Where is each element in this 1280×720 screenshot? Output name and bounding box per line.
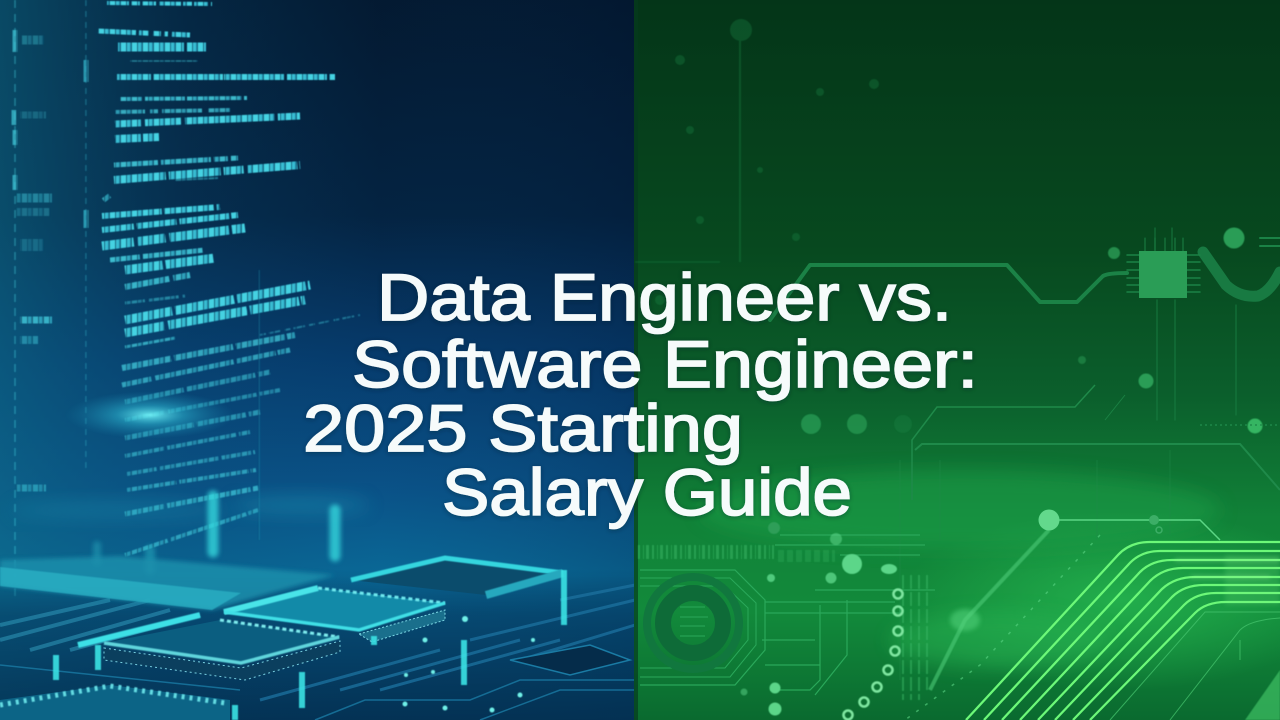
concentric circuit ring [640, 535, 935, 695]
panel: blue data engineering background [0, 0, 635, 720]
bundled glowing green traces [966, 542, 1280, 720]
icon: central light flare [65, 391, 235, 439]
solid green pads [740, 522, 897, 716]
chip: front left [78, 615, 340, 680]
title line 3: 2025 Starting [303, 391, 743, 465]
node with glowing diagonal beam [905, 510, 1220, 720]
chip: centre [224, 588, 445, 642]
chip: back right [351, 558, 563, 595]
faint top-area nodes and lines [635, 19, 879, 305]
title line 2: Software Engineer: [352, 327, 978, 401]
panel: green software engineering background [634, 0, 1280, 720]
glowing vertical connectors [97, 496, 335, 570]
title line 1: Data Engineer vs. [377, 260, 952, 334]
small glowing dots on the board [402, 616, 535, 712]
title [303, 260, 978, 529]
circuit board traces under the chips [0, 570, 635, 720]
code screen: glowing lines of code [14, 0, 360, 600]
ring pads [844, 590, 902, 720]
trace highlights and thin outer lines [1110, 555, 1280, 720]
nodes on the right upper area [801, 228, 1262, 434]
chip slab: large back platform [0, 556, 335, 610]
chip: bottom foreground with pins [0, 685, 230, 720]
icon: square microchip [1139, 251, 1187, 298]
glowing pillars on the board [56, 570, 564, 720]
microtext band on circuit [638, 552, 927, 700]
title line 4: Salary Guide [442, 455, 852, 529]
circuit trace with square chip [770, 228, 1280, 420]
lower circuit outlines [900, 385, 1280, 680]
